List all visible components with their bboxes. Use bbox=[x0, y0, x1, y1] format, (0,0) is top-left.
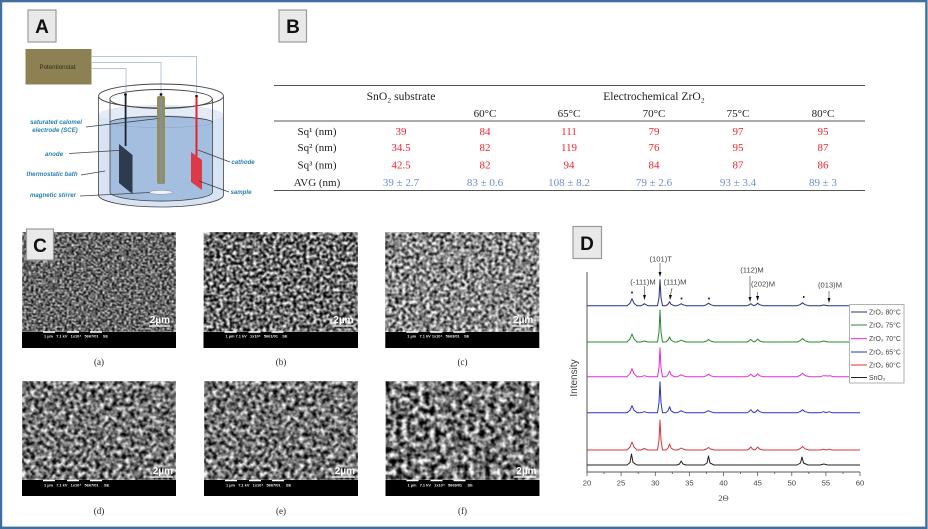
axes bbox=[587, 272, 860, 476]
trace ZrO2 80C bbox=[587, 280, 849, 306]
caption d: (d) bbox=[94, 506, 104, 516]
trace SnO2 bbox=[587, 454, 860, 465]
table header bbox=[367, 90, 834, 120]
row Sq2 bbox=[297, 142, 829, 154]
row Sq3 bbox=[297, 160, 829, 172]
panel C: SEM micrographs bbox=[22, 229, 540, 516]
row Sq1: 95 bbox=[818, 126, 829, 138]
SEM image e: 1 µm 7.1 kV 1x10⁴ 5667/01 SE bbox=[226, 482, 292, 488]
caption b: (b) bbox=[276, 357, 286, 367]
row AVG: 83 ± 0.6 bbox=[467, 177, 504, 189]
diagram labels: thermostatic bath bbox=[26, 171, 78, 178]
x tick labels: 40 bbox=[719, 478, 728, 488]
trace ZrO2 65C bbox=[587, 382, 860, 413]
x tick labels: 45 bbox=[753, 478, 762, 488]
label A: A bbox=[35, 17, 49, 38]
SEM image d bbox=[22, 381, 176, 496]
SEM image f: 2µm bbox=[516, 466, 537, 477]
table header: 65°C bbox=[558, 108, 580, 120]
row AVG bbox=[294, 177, 838, 189]
row AVG: 39 ± 2.7 bbox=[383, 177, 420, 189]
label C: C bbox=[33, 236, 47, 257]
SEM image e: 2µm bbox=[335, 466, 355, 477]
row Sq2: 87 bbox=[818, 142, 829, 154]
label C bbox=[26, 229, 54, 260]
peak annotations: (-111)M bbox=[630, 278, 656, 286]
SEM image d: 1 µm 7.1 kV 1x10⁴ 5667/01 SE bbox=[44, 482, 110, 488]
row Sq1: 84 bbox=[480, 126, 491, 138]
peak annotations: (202)M bbox=[751, 280, 775, 288]
table header: 70°C bbox=[643, 108, 665, 120]
SEM image c bbox=[385, 232, 539, 348]
legend: ZrO₂ 65°C bbox=[869, 348, 901, 356]
caption e: (e) bbox=[276, 506, 286, 516]
row Sq2: 119 bbox=[561, 142, 578, 154]
row Sq3: 87 bbox=[732, 160, 744, 172]
table header: 75°C bbox=[727, 108, 749, 120]
potentiostat box bbox=[26, 49, 92, 84]
diagram labels: anode bbox=[45, 151, 64, 158]
table header: Electrochemical ZrO₂ bbox=[603, 90, 705, 103]
peak annotations: (013)M bbox=[818, 280, 842, 290]
SEM image d: 2µm bbox=[153, 466, 173, 477]
row Sq2: 34.5 bbox=[391, 142, 411, 154]
peak annotations: (101)T bbox=[650, 254, 672, 264]
row Sq2: 95 bbox=[732, 142, 744, 154]
trace ZrO2 60C bbox=[587, 420, 860, 450]
row Sq1: Sq¹ (nm) bbox=[297, 126, 337, 138]
diagram labels: sample bbox=[230, 189, 252, 196]
row Sq3: 86 bbox=[818, 160, 829, 172]
panel A: electrochemical cell diagram bbox=[26, 10, 255, 207]
thermostatic cell bbox=[98, 84, 224, 207]
SEM image c: 1 µm 7.1 kV 1x10⁴ 5663/01 SE bbox=[407, 334, 470, 338]
row Sq3: 42.5 bbox=[391, 160, 411, 172]
row AVG: 93 ± 3.4 bbox=[720, 177, 757, 189]
SEM image b bbox=[204, 232, 358, 348]
peak annotations: (112)M bbox=[740, 266, 764, 274]
panel B: roughness table bbox=[274, 10, 865, 190]
peak annotations: (111)M bbox=[664, 278, 686, 286]
row Sq3: 82 bbox=[480, 160, 490, 172]
diagram labels: cathode bbox=[231, 159, 255, 166]
table header: 60°C bbox=[474, 108, 496, 120]
SEM image a bbox=[22, 232, 176, 348]
legend: SnO₂ bbox=[869, 375, 886, 382]
table header: SnO₂ substrate bbox=[367, 90, 435, 103]
label B bbox=[279, 10, 306, 42]
legend: ZrO₂ 80°C bbox=[869, 308, 901, 316]
x tick labels: 30 bbox=[651, 478, 660, 488]
SEM image f bbox=[386, 381, 540, 496]
caption a: (a) bbox=[94, 357, 104, 367]
potentiostat connecting wires bbox=[92, 56, 196, 94]
table header: 80°C bbox=[812, 108, 834, 120]
x tick labels: 55 bbox=[822, 478, 830, 488]
star markers bbox=[631, 292, 805, 300]
legend: ZrO₂ 60°C bbox=[869, 362, 901, 370]
panel D: XRD chart bbox=[569, 226, 904, 503]
x axis title: 2Θ bbox=[718, 493, 729, 503]
row Sq2: Sq² (nm) bbox=[297, 142, 337, 154]
row Sq1: 79 bbox=[648, 126, 660, 138]
x tick labels: 60 bbox=[856, 478, 864, 488]
SEM image b: 1 µm 7.1 kV 1x10⁴ 5661/01 SE bbox=[226, 334, 288, 338]
SEM image a: 2µm bbox=[150, 315, 170, 326]
cathode and sample bbox=[191, 95, 202, 190]
label D: D bbox=[580, 234, 594, 255]
row AVG: 79 ± 2.6 bbox=[636, 177, 673, 189]
legend bbox=[850, 304, 904, 383]
x tick labels: 50 bbox=[788, 478, 796, 488]
row AVG: AVG (nm) bbox=[294, 177, 341, 189]
leader lines bbox=[69, 118, 230, 196]
caption c: (c) bbox=[458, 357, 468, 367]
SEM image a: 1 µm 7.1 kV 1x10⁴ 5667/01 SE bbox=[44, 334, 108, 338]
x tick labels: 35 bbox=[685, 478, 694, 488]
diagram labels: saturated calomel bbox=[30, 119, 82, 126]
peak annotations bbox=[630, 254, 842, 290]
peak arrows bbox=[643, 263, 830, 303]
row AVG: 89 ± 3 bbox=[809, 177, 838, 189]
anode electrode bbox=[119, 93, 132, 194]
SEM image c: 2µm bbox=[513, 315, 533, 326]
row Sq3: 94 bbox=[564, 160, 575, 172]
row Sq3: Sq³ (nm) bbox=[297, 160, 337, 172]
label D bbox=[573, 226, 602, 258]
magnetic stirrer bbox=[150, 190, 172, 194]
caption f: (f) bbox=[458, 506, 467, 516]
label A bbox=[28, 10, 56, 42]
diagram labels bbox=[26, 119, 255, 199]
legend: ZrO₂ 75°C bbox=[869, 322, 901, 330]
x tick labels: 25 bbox=[617, 478, 625, 488]
legend: ZrO₂ 70°C bbox=[869, 335, 901, 343]
row Sq1: 97 bbox=[732, 126, 744, 138]
SEM image f: 1 µm 7.1 kV 1x10⁴ 5669/01 SE bbox=[408, 482, 473, 488]
trace ZrO2 70C bbox=[587, 348, 849, 377]
row Sq1: 39 bbox=[396, 126, 407, 138]
x tick labels bbox=[583, 478, 864, 488]
row Sq3: 84 bbox=[648, 160, 660, 172]
trace ZrO2 75C bbox=[587, 310, 849, 342]
row Sq2: 76 bbox=[648, 142, 660, 154]
x tick labels: 20 bbox=[583, 478, 591, 488]
SEM image b: 2µm bbox=[333, 315, 354, 326]
calomel electrode bbox=[157, 93, 165, 184]
diagram labels: magnetic stirrer bbox=[30, 192, 77, 199]
row AVG: 108 ± 8.2 bbox=[548, 177, 590, 189]
row Sq1 bbox=[297, 126, 829, 138]
y axis title: Intensity bbox=[569, 359, 580, 397]
row Sq2: 82 bbox=[480, 142, 490, 154]
diagram labels: electrode (SCE) bbox=[32, 127, 78, 134]
SEM image e bbox=[204, 381, 358, 496]
potentiostat box: Potentionstat bbox=[39, 64, 76, 71]
row Sq1: 111 bbox=[561, 126, 577, 138]
label B: B bbox=[286, 17, 300, 38]
table rules bbox=[274, 86, 865, 190]
